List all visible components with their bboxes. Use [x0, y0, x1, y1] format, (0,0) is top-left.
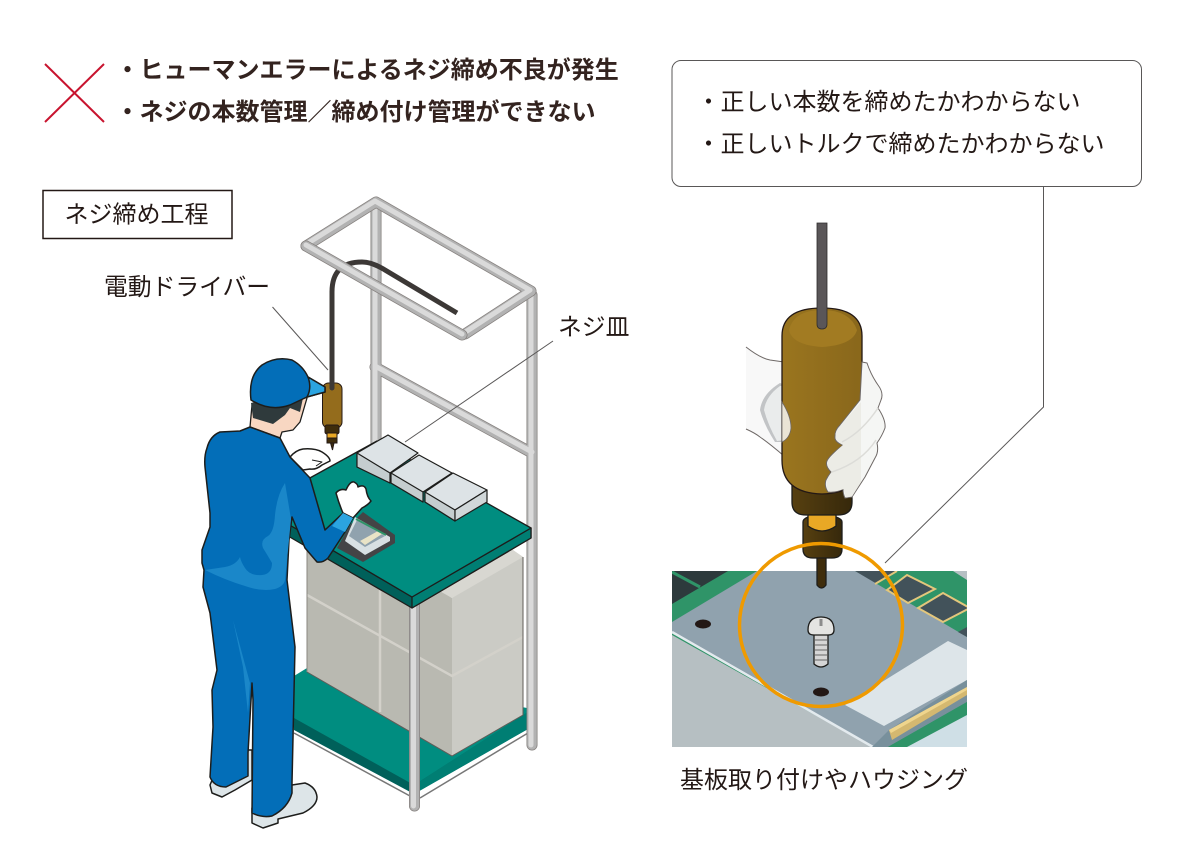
problem line 1: ・ヒューマンエラーによるネジ締め不良が発生	[116, 56, 619, 84]
lower shelf	[294, 668, 528, 798]
uniform highlights	[205, 483, 291, 713]
electric driver	[322, 383, 342, 450]
label box: screw fastening process	[43, 190, 232, 238]
callout: cannot verify screw count and torque: ・正しい本数を締めたかわからない	[696, 89, 1080, 116]
sleeve cuff	[332, 513, 353, 532]
shoes	[210, 750, 317, 828]
driver body	[782, 308, 862, 494]
screw trays	[357, 435, 487, 521]
fingertip of back hand	[782, 402, 791, 442]
copper pads	[887, 575, 968, 622]
near hand glove	[336, 482, 371, 518]
white label	[845, 641, 967, 726]
circuit board and housing	[672, 571, 968, 747]
callout: cannot verify screw count and torque: ・正しいトルクで締めたかわからない	[696, 131, 1104, 158]
illustration: workbench and worker	[104, 201, 629, 828]
storage boxes under table	[307, 530, 523, 756]
driver lower collar and bit	[792, 483, 852, 588]
rack: front top tube	[306, 245, 462, 335]
table top	[288, 441, 531, 608]
callout: cannot verify screw count and torque	[672, 60, 1142, 186]
connector	[872, 680, 967, 747]
rack: back frame tubes	[305, 201, 532, 745]
screw	[808, 617, 834, 667]
driver cable	[332, 262, 457, 388]
driver body top highlight	[789, 310, 857, 347]
front rack tube	[414, 600, 415, 806]
cap	[250, 359, 325, 408]
heading: problem list	[116, 56, 619, 126]
orange highlight circle	[740, 544, 902, 706]
label box: screw fastening process: ネジ締め工程	[64, 202, 208, 228]
leader: screw tray	[405, 341, 553, 442]
leader: electric driver	[272, 307, 328, 370]
fixture with circuit board	[337, 512, 395, 562]
callout leader line	[885, 186, 1044, 563]
white glove sleeve, back hand	[746, 347, 785, 456]
uniform	[202, 427, 353, 817]
far hand glove	[290, 449, 330, 470]
driver cable	[817, 223, 827, 329]
icon: red cross mark	[45, 64, 104, 122]
hair	[251, 395, 303, 424]
label: electric driver: 電動ドライバー	[104, 274, 270, 301]
problem line 2: ・ネジの本数管理／締め付け管理ができない	[116, 98, 596, 126]
rack: right tube over shelf	[531, 695, 532, 740]
label: screw tray: ネジ皿	[558, 314, 629, 341]
worker	[202, 359, 371, 828]
white glove, front hand	[825, 362, 885, 498]
illustration: close-up screw fastening	[672, 223, 968, 794]
neck and face	[250, 395, 307, 438]
caption: board mounting and housing: 基板取り付けやハウジング	[680, 767, 968, 794]
screw holes	[695, 620, 829, 696]
